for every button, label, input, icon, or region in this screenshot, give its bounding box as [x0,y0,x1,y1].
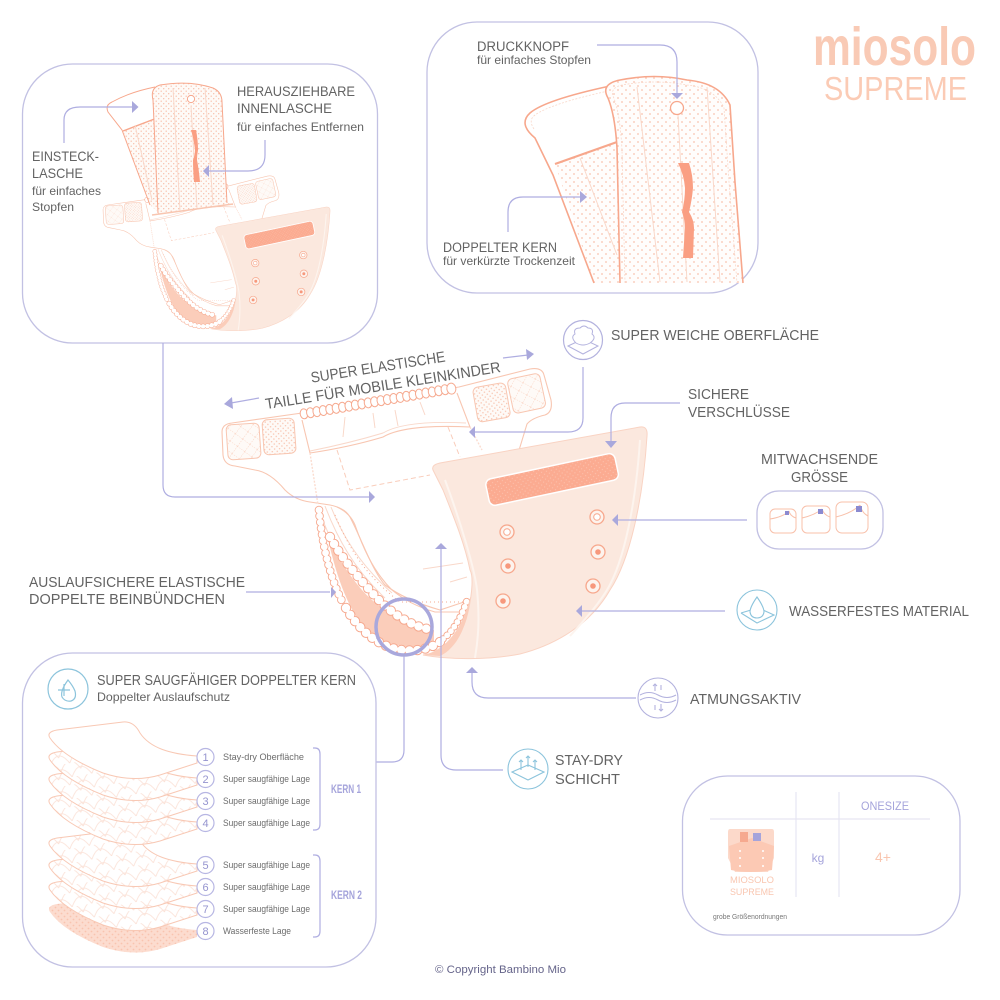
mini nappy medium [802,506,830,533]
label: waterproof: WASSERFESTES MATERIAL [789,603,969,620]
arrow: double core [508,191,587,232]
product name: MIOSOLO [730,875,774,885]
insert pad illustration [107,83,233,215]
label: insert pocket: EINSTECK- [32,148,99,164]
label: breathable: ATMUNGSAKTIV [690,691,801,708]
layer numbers: 1 [202,752,209,764]
label: stay-dry [555,752,623,788]
arrow: press stud [597,45,683,99]
icon: soft surface [564,320,602,360]
arrow: panel to inner pocket [163,343,375,503]
arrow: insert pocket [64,101,138,143]
panel: double core insert detail [427,22,758,293]
panel: removable pull-out tab detail [22,64,378,343]
icon: stay-dry [508,749,548,789]
wing tabs [226,373,546,460]
panel: growing size [757,491,883,549]
heading: core: Doppelter Auslaufschutz [97,690,230,704]
mini nappy small [770,509,796,533]
label: core 2: KERN 2 [331,890,362,902]
layer labels: Super saugfähige Lage [223,796,310,807]
label: stretchy waist: SUPER ELASTISCHE [310,349,447,387]
label: press stud [477,39,591,67]
pad illustration large [525,76,743,283]
label: insert pocket: für einfaches [32,184,101,198]
label: secure closures [688,386,790,421]
label: double core: DOPPELTER KERN [443,240,557,255]
small nappy illustration [103,176,330,331]
back waist and wings [222,369,551,610]
column heading: ONESIZE [861,799,909,813]
waist inner stitching [302,393,482,505]
unit: kg [812,851,824,865]
heading: core: SUPER SAUGFÄHIGER DOPPELTER KERN [97,672,356,689]
arrow: waterproof [576,605,725,617]
label: stay-dry: STAY-DRY [555,752,623,769]
label: growing size: MITWACHSENDE [761,452,878,468]
label: press stud: DRUCKKNOPF [477,39,569,54]
label: leak-proof cuffs: DOPPELTE BEINBÜNDCHEN [29,590,225,608]
arrow: waist right [503,349,534,360]
layer numbers: 5 [202,860,209,872]
label: pull-out tab [237,83,364,134]
layer numbers: 6 [202,882,209,894]
logo: SUPREME [824,70,967,107]
label: stay-dry: SCHICHT [555,771,620,788]
waist elastic beads [299,382,457,420]
arrow: soft surface [469,367,583,438]
product thumbnail [728,829,774,872]
footnote: grobe Größenordnungen [713,914,787,921]
layer numbers: 3 [202,796,209,808]
heading: core [97,672,356,704]
main nappy illustration [222,369,647,659]
product name [730,875,774,897]
label: growing size [761,452,878,486]
layer labels: Super saugfähige Lage [223,774,310,785]
layer numbers: 2 [202,774,209,786]
layer labels: Super saugfähige Lage [223,882,310,893]
label: double core [443,240,576,268]
label: pull-out tab: INNENLASCHE [237,100,332,116]
layered core illustration [49,722,197,953]
layer labels: Wasserfeste Lage [223,926,291,937]
arrow: growing size [612,514,747,526]
leg inner lines [318,506,470,612]
icon: waterproof [737,590,777,630]
layer numbers: 7 [202,904,209,916]
arrow: secure closures [605,403,680,448]
layer labels: Stay-dry Oberfläche [223,752,304,763]
layer labels: Super saugfähige Lage [223,904,310,915]
panel: absorbent double core [22,653,376,967]
arrow: leak-proof cuffs [246,587,336,598]
logo [813,17,976,107]
label: press stud: für einfaches Stopfen [477,53,591,67]
panel: size table [682,776,960,935]
label: core 1: KERN 1 [331,784,361,796]
label: secure closures: VERSCHLÜSSE [688,403,790,421]
icon: breathable [638,678,678,718]
layer labels: Super saugfähige Lage [223,818,310,829]
mini nappy large [836,502,868,533]
label: soft surface: SUPER WEICHE OBERFLÄCHE [611,327,819,344]
label: leak-proof cuffs: AUSLAUFSICHERE ELASTISCHE [29,574,245,591]
arrow: waist left [224,397,259,409]
arrow: stay-dry [435,543,503,770]
label: stretchy waist: TAILLE FÜR MOBILE KLEINKINDER [264,358,502,413]
label: secure closures: SICHERE [688,386,749,403]
layer numbers: 8 [202,926,209,938]
icon: drop plus [48,669,88,709]
label: growing size: GRÖSSE [791,468,848,486]
label: insert pocket [32,148,101,214]
label: insert pocket: LASCHE [32,165,83,181]
front panel stitching [445,440,640,658]
label: leak-proof cuffs [29,574,245,608]
copyright: © Copyright Bambino Mio [435,964,566,976]
layer numbers: 4 [202,818,209,830]
label: pull-out tab: für einfaches Entfernen [237,120,364,134]
layer labels: Super saugfähige Lage [223,860,310,871]
lens circle over leg elastic [376,599,432,655]
front panel fold shade [424,598,470,656]
front panel [423,427,647,659]
closure strip [485,453,619,506]
leg elastic inner [330,537,434,630]
label: insert pocket: Stopfen [32,200,74,214]
arrow: lens to core panel [376,656,404,762]
layer numbers [197,748,214,940]
arrow: breathable [466,667,636,698]
bracket: core 1 [313,748,320,830]
size markers [785,506,862,515]
leg salmon fill [327,535,434,647]
size value: 4+ [875,849,891,865]
label: pull-out tab: HERAUSZIEHBARE [237,83,355,99]
product name: SUPREME [730,887,774,897]
snap buttons [496,510,605,608]
bracket: core 2 [313,855,320,937]
table grid [710,792,930,897]
leg elastic outer [319,510,468,650]
arrow: pull-out tab [203,140,265,177]
layer labels [223,752,310,937]
label: double core: für verkürzte Trockenzeit [443,254,576,268]
